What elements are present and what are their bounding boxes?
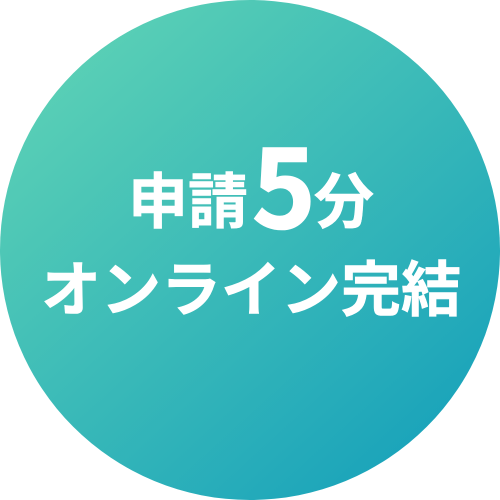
- heading line 1: 5: [252, 104, 316, 260]
- heading line 2: オンライン完結: [41, 242, 461, 329]
- heading line 1: [128, 104, 374, 260]
- heading line 1: 申請: [128, 154, 248, 241]
- heading line 1: 分: [314, 154, 374, 241]
